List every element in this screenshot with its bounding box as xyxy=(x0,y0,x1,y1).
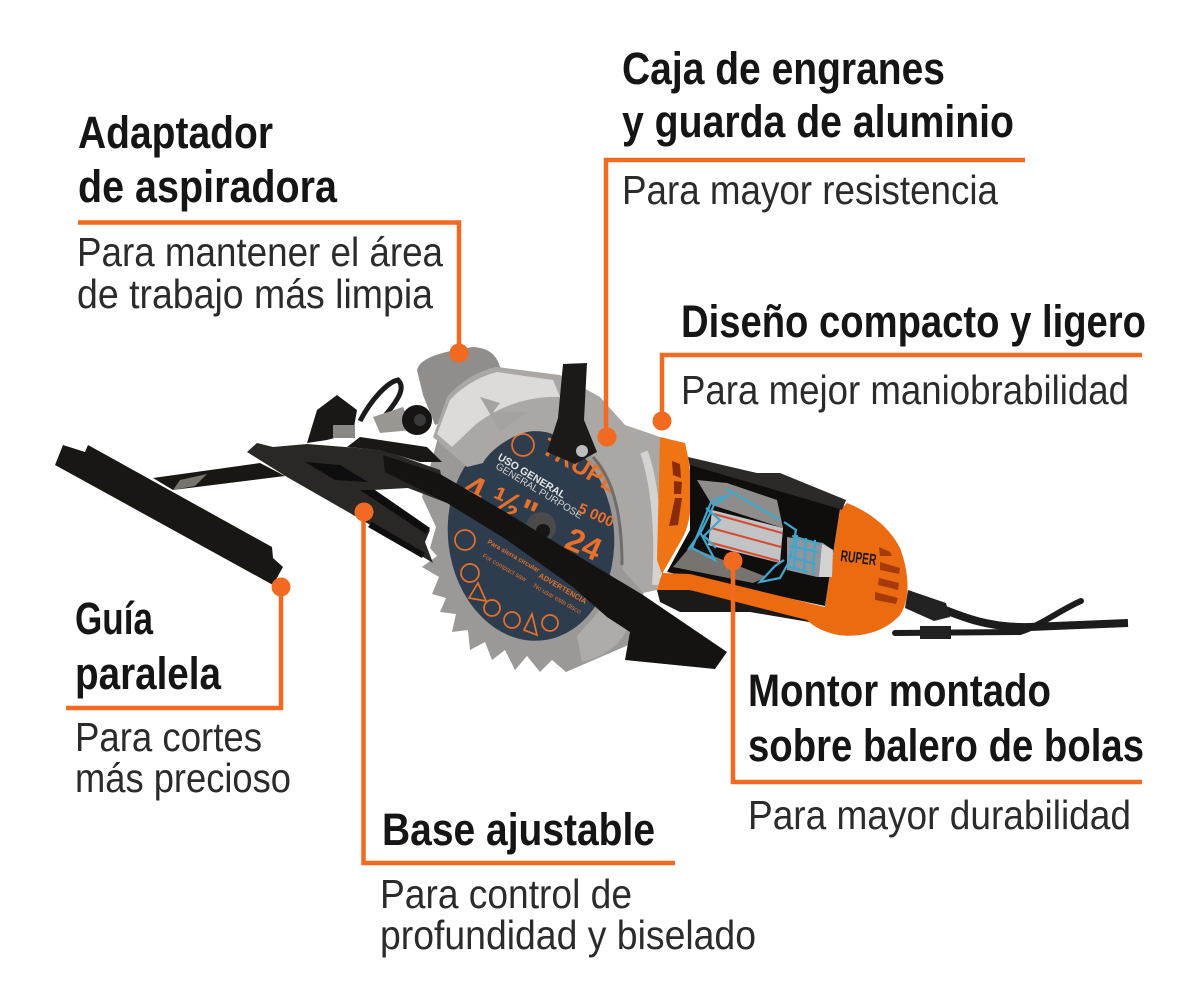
leader line xyxy=(354,502,675,863)
description: Para mayor durabilidad xyxy=(748,792,1131,838)
callout: diseño compacto xyxy=(652,296,1146,430)
callout: base ajustable xyxy=(354,502,756,958)
description: más precioso xyxy=(75,755,291,801)
description xyxy=(75,714,291,801)
saw blade teeth xyxy=(422,400,650,672)
blue disc with label text: GENERAL PURPOSE xyxy=(493,461,584,522)
description: Para mantener el área xyxy=(77,229,443,275)
callout: caja de engranes xyxy=(598,43,1025,446)
depth knob and clamp xyxy=(307,380,442,462)
heading xyxy=(75,593,222,699)
heading: Base ajustable xyxy=(382,804,655,855)
blue disc with label text: No usar este disco xyxy=(532,583,582,616)
motor cutaway with armature xyxy=(667,465,840,606)
description: Para mejor maniobrabilidad xyxy=(681,367,1129,413)
leader line xyxy=(66,578,290,708)
leader line xyxy=(598,160,1025,446)
blue disc with label text: USO GENERAL xyxy=(495,451,568,502)
orange motor housing xyxy=(657,437,908,636)
heading: Adaptador xyxy=(78,107,273,158)
heading: y guarda de aluminio xyxy=(622,96,1014,147)
heading: Montor montado xyxy=(748,665,1051,716)
description: de trabajo más limpia xyxy=(77,271,433,317)
locking lever xyxy=(547,363,597,464)
adjustable base xyxy=(247,443,820,669)
callout: adaptador de aspiradora xyxy=(77,107,468,362)
blue disc with label text: 24 xyxy=(560,521,607,568)
description xyxy=(380,871,756,958)
black motor top grip xyxy=(688,457,846,510)
orange motor housing: RUPER xyxy=(840,548,878,569)
heading: de aspiradora xyxy=(78,161,338,212)
blue disc with label text: For compact saw xyxy=(481,553,528,584)
blue disc with label text: 4 ½" xyxy=(457,466,544,535)
leader line xyxy=(724,552,1142,782)
leader line xyxy=(652,355,1142,430)
blue disc with label text: Para sierra circular xyxy=(486,539,541,574)
blue disc with label text xyxy=(437,421,640,649)
heading xyxy=(78,107,338,212)
description xyxy=(77,229,443,317)
orange lower strip xyxy=(657,573,830,620)
description: profundidad y biselado xyxy=(380,912,756,958)
parallel guide fence xyxy=(55,445,285,585)
callout: guía paralela xyxy=(66,578,291,801)
heading: Caja de engranes xyxy=(622,43,945,94)
callout: motor montado xyxy=(724,552,1144,838)
description: Para mayor resistencia xyxy=(622,167,998,213)
heading: sobre balero de bolas xyxy=(748,720,1144,771)
blue disc with label text: ADVERTENCIA xyxy=(537,571,589,606)
gray aluminium guard xyxy=(417,347,664,662)
blue disc with label text: TRUPER xyxy=(537,433,640,509)
leader line xyxy=(78,222,468,362)
heading: paralela xyxy=(75,648,222,699)
power cord xyxy=(895,590,1128,639)
heading xyxy=(748,665,1144,771)
heading: Guía xyxy=(75,593,154,644)
heading xyxy=(622,43,1014,147)
description: Para control de xyxy=(380,871,632,917)
blue disc with label text: 5 000 xyxy=(575,500,617,531)
description: Para cortes xyxy=(75,714,262,760)
illustration: compact circular saw xyxy=(55,347,1128,672)
